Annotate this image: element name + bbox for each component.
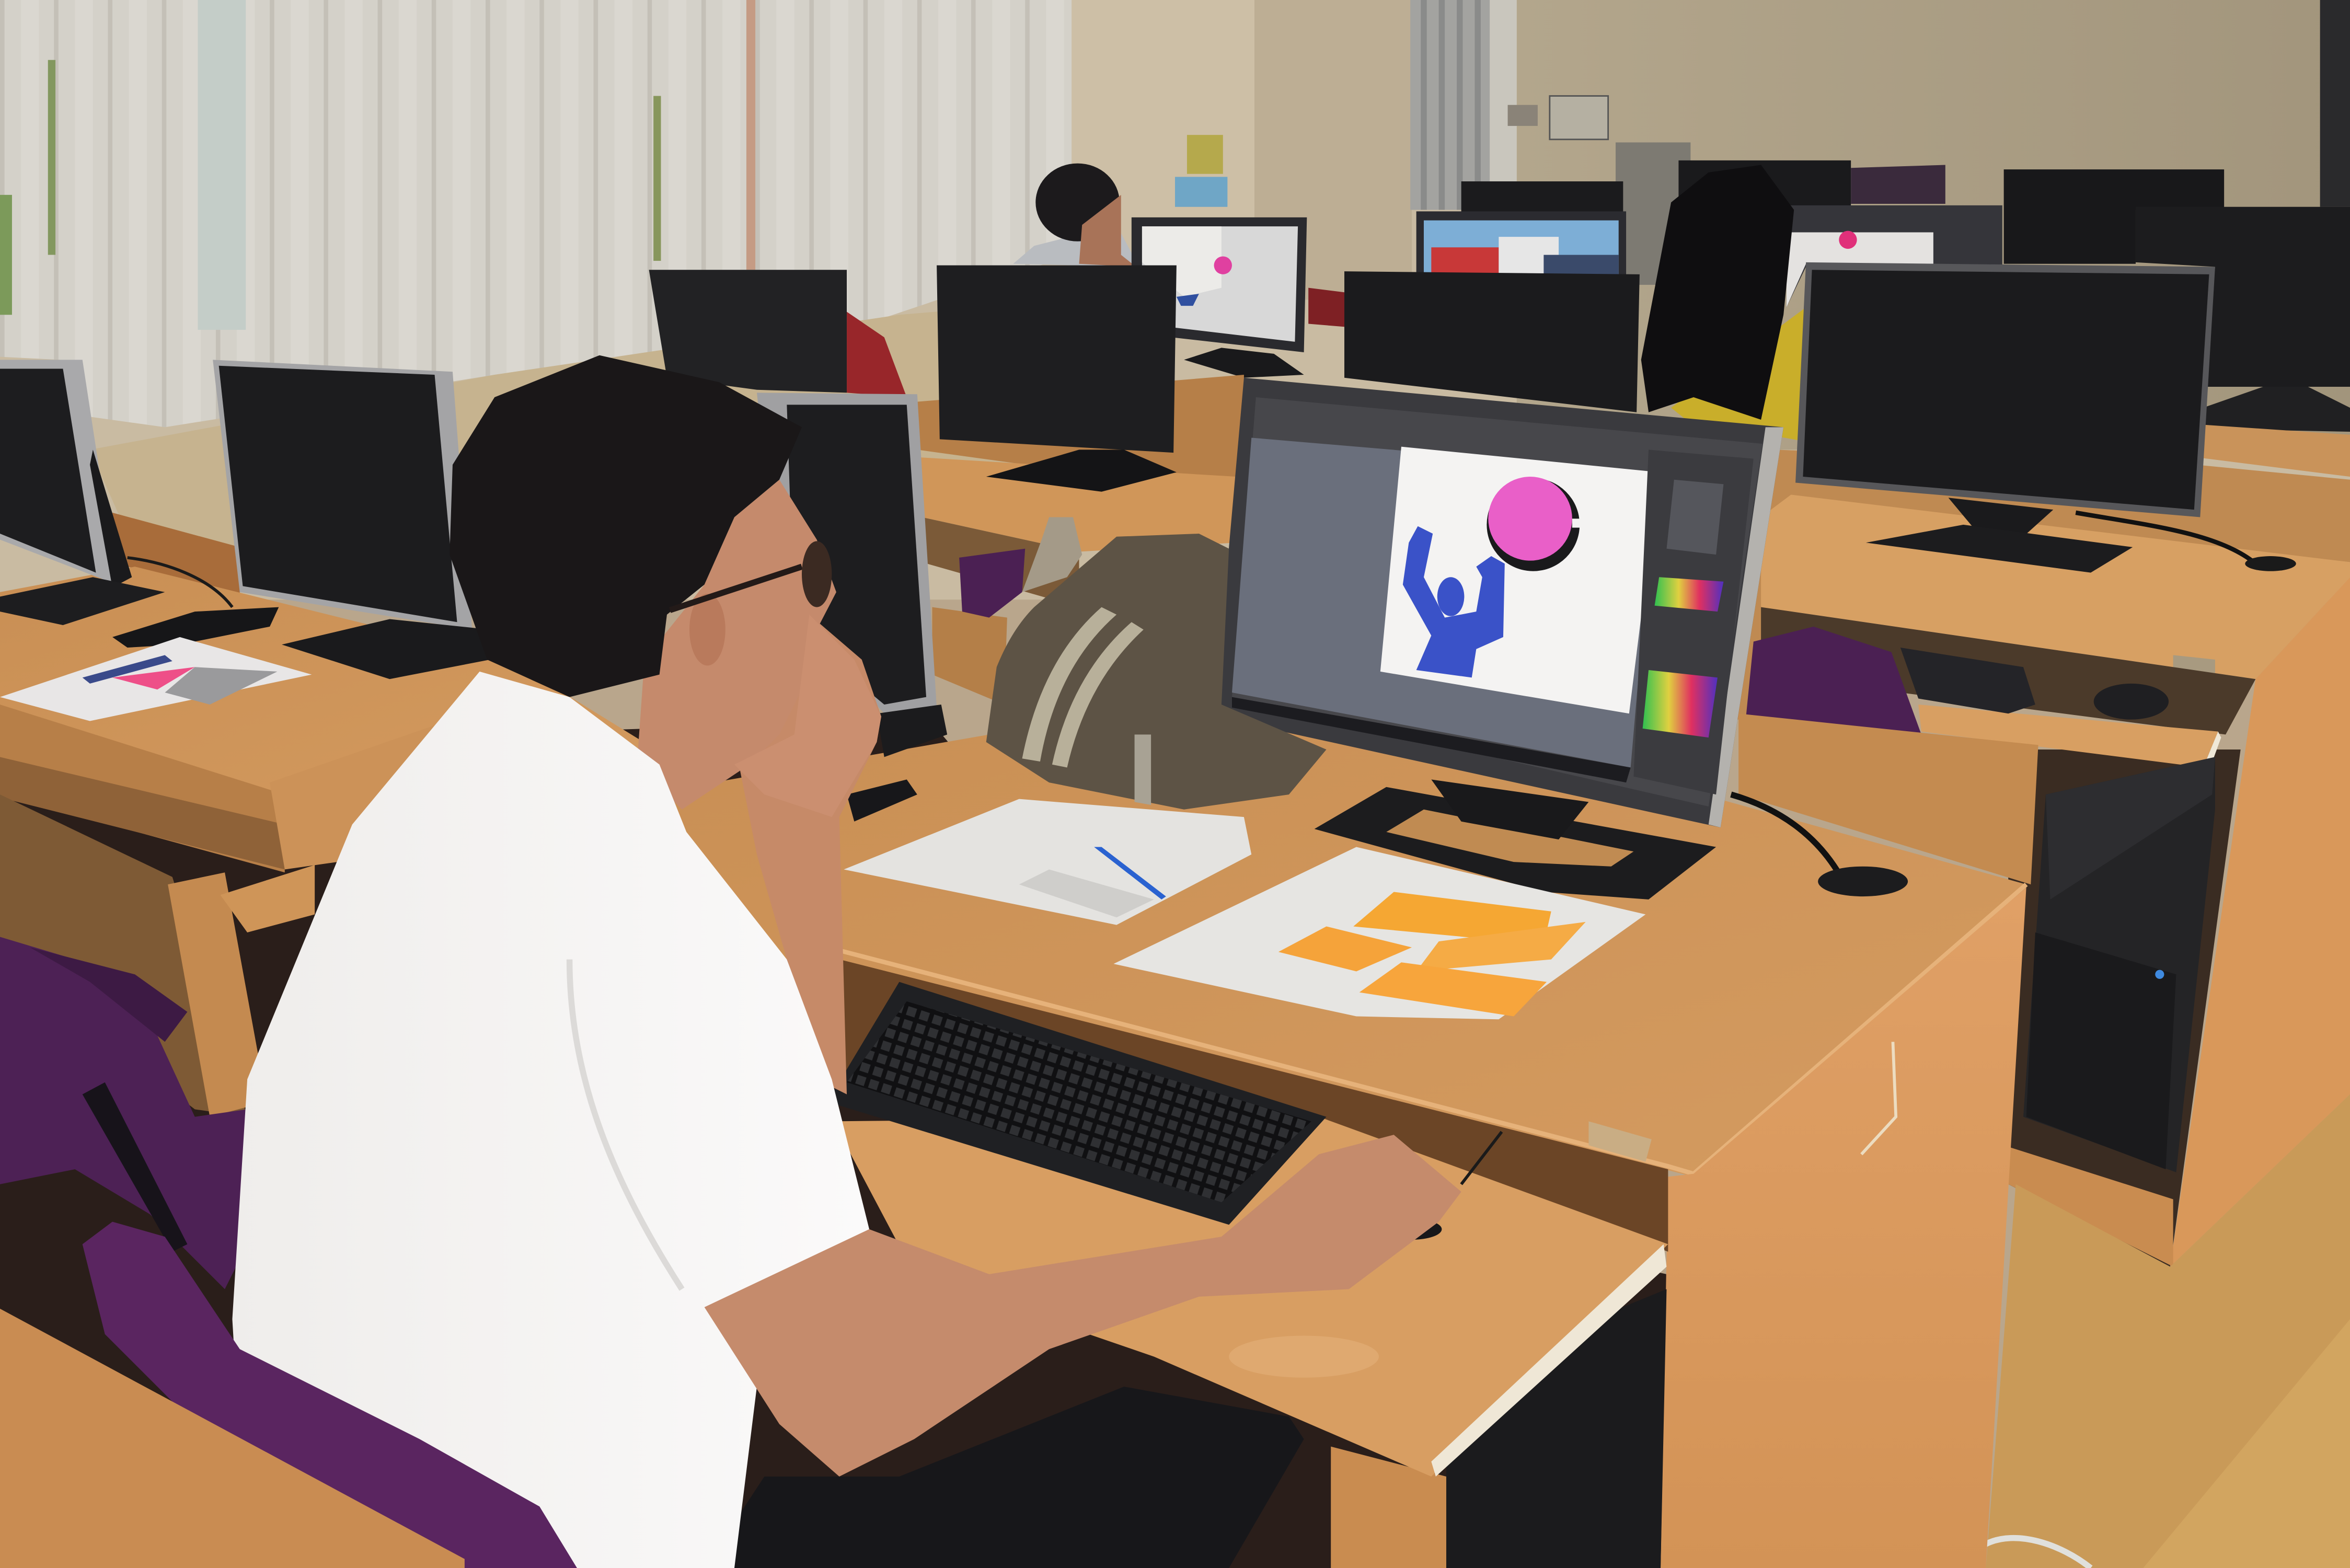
artboard <box>1380 447 1659 713</box>
floor <box>1986 1094 2350 1568</box>
rear wall <box>0 0 2350 599</box>
monitor behind woman <box>1787 205 2002 307</box>
right keyboard and mouse <box>1900 648 2169 720</box>
right desk partition and panel <box>1761 494 2350 1267</box>
woman in yellow <box>1641 165 1809 442</box>
left desk <box>0 513 705 1117</box>
white polo shirt <box>232 672 869 1568</box>
background monitor with pink circle artwork <box>1132 217 1307 378</box>
sleeve fold <box>570 960 682 1289</box>
hair <box>450 355 802 697</box>
window curtain <box>1410 0 1490 210</box>
under-desk shadow <box>0 720 1666 1568</box>
forearm and hand on mouse <box>705 1135 1461 1477</box>
foreground desk corner <box>0 1309 465 1568</box>
keyboard <box>827 982 1327 1225</box>
mouse and cable <box>1382 1132 1502 1240</box>
blue silhouette artwork <box>1403 526 1505 677</box>
computer tower <box>2023 757 2215 1172</box>
left small tray <box>221 865 315 932</box>
foreground left chair <box>0 937 247 1289</box>
taskbar <box>1232 697 1631 782</box>
right purple chair <box>1746 627 1921 734</box>
foreground purple chair <box>83 1221 577 1568</box>
colour picker panel <box>1633 449 1754 794</box>
back desk right <box>2196 424 2350 477</box>
left desk cables and mouse <box>112 558 279 648</box>
monitor back row facing viewer <box>937 266 1177 492</box>
backpack <box>986 534 1327 810</box>
neck and face <box>637 480 836 810</box>
red chair in background <box>1308 288 1344 327</box>
papers on left desk <box>0 637 312 721</box>
window blinds <box>0 0 1072 427</box>
canvas area <box>1232 437 1656 767</box>
middle-back desk <box>917 375 1244 607</box>
supporting arm <box>738 615 881 1094</box>
main desk side panel <box>1588 887 2026 1568</box>
monitor rear center <box>1344 271 1640 412</box>
main monitor <box>1214 378 1783 827</box>
trousers <box>705 1387 1304 1568</box>
right monitor <box>1795 262 2296 573</box>
foreground man <box>232 355 1461 1568</box>
cable and desk grommet <box>1731 794 1908 896</box>
ear <box>689 594 725 665</box>
main desk top <box>644 717 2026 1177</box>
main desk back panel <box>1738 713 2038 884</box>
left monitor <box>0 360 165 625</box>
glasses <box>670 541 832 610</box>
far right back monitors <box>1461 160 2350 432</box>
floor behind desks <box>90 300 1079 599</box>
under keyboard dark recess <box>839 960 1668 1252</box>
purple chair back center <box>959 549 1025 618</box>
background person <box>1013 164 1139 267</box>
monitor with blue artwork <box>1416 211 1626 276</box>
notebook <box>844 799 1251 925</box>
water bottle <box>1022 517 1082 592</box>
pink circle artwork <box>1487 477 1590 571</box>
second left monitor <box>213 360 490 679</box>
hand at chin <box>734 615 881 817</box>
main monitor stand <box>1315 779 1716 900</box>
phone <box>847 779 917 822</box>
keyboard tray <box>833 1117 1668 1477</box>
monitor and red chair at left back <box>649 270 907 397</box>
middle monitor near head <box>757 393 947 757</box>
back partition <box>1649 420 2350 720</box>
papers with sticky notes <box>1113 847 1645 1019</box>
under desk pc <box>1446 1289 1666 1568</box>
